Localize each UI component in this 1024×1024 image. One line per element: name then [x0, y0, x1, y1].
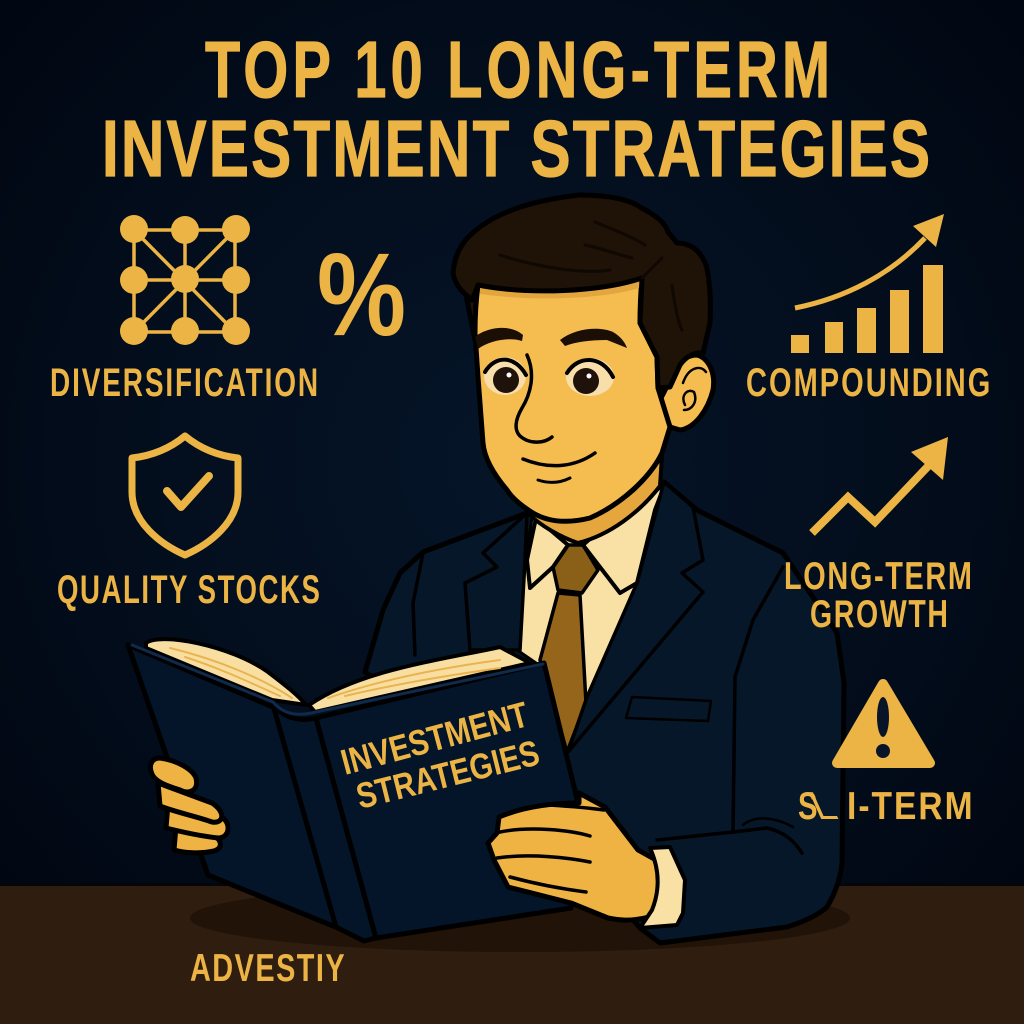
book cover title [336, 693, 543, 817]
title: TOP 10 LONG-TERM [205, 25, 830, 114]
book top edge [132, 645, 543, 714]
right hand [488, 793, 659, 920]
label: diversification: DIVERSIFICATION [50, 361, 318, 405]
eyes [484, 357, 614, 396]
shirt cuff [640, 847, 685, 928]
icon: shield with check [132, 436, 238, 555]
man figure [365, 195, 844, 943]
label: long-term growth: GROWTH [810, 593, 948, 636]
nose and mouth [516, 355, 595, 482]
book cover title: STRATEGIES [352, 732, 543, 817]
icon: compounding bars and arrow [791, 214, 944, 353]
book right cover [316, 663, 578, 938]
label: short-term: L [802, 784, 844, 828]
ear [660, 355, 714, 430]
label: quality stocks: QUALITY STOCKS [57, 568, 320, 612]
suit jacket [365, 482, 844, 943]
icon: growth arrow [812, 437, 948, 533]
icon: warning triangle [837, 684, 930, 763]
title [102, 25, 930, 193]
forehead shadow [480, 281, 640, 298]
left hand [150, 758, 228, 853]
neck shadow [530, 455, 662, 543]
label: long-term growth [784, 555, 972, 636]
label: adversity: ADVESTIY [190, 947, 345, 990]
shirt [517, 484, 665, 700]
face [475, 278, 670, 521]
label: long-term growth: LONG-TERM [784, 555, 972, 598]
label: short-term: I-TERM [847, 784, 973, 828]
tie [540, 545, 598, 752]
hair highlights [500, 222, 682, 330]
open book [128, 639, 578, 941]
book left cover [128, 645, 338, 928]
percent sign: % [317, 229, 406, 361]
book cover title: INVESTMENT [336, 693, 533, 783]
title: INVESTMENT STRATEGIES [102, 104, 930, 193]
shirt collar [527, 484, 665, 593]
table [0, 883, 1024, 1024]
label: short-term: S [798, 785, 818, 828]
book spine [273, 705, 376, 941]
icon: diversification network [120, 215, 250, 345]
hair [453, 195, 710, 388]
jacket lapels [465, 482, 703, 752]
hair back [465, 290, 500, 340]
label: compounding: COMPOUNDING [746, 361, 990, 405]
breast pocket [626, 697, 711, 721]
eyebrows [475, 328, 627, 349]
book pages [146, 639, 530, 712]
